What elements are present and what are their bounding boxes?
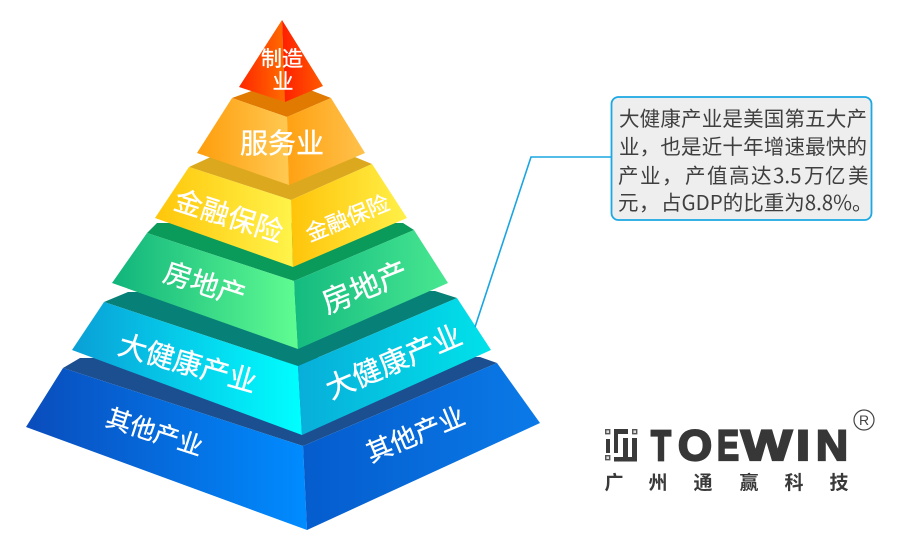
- tier: 大健康产业: [72, 291, 491, 435]
- callout box: ，: [639, 186, 660, 216]
- wordmark: T: [651, 422, 671, 470]
- logo: TOEWIN: [604, 410, 874, 495]
- callout box: 达: [751, 159, 772, 189]
- callout box: 业，也是近十年增速最快的: [619, 130, 867, 160]
- tier: 制造业: 业: [272, 66, 294, 96]
- tier: 服务业: [197, 88, 365, 185]
- tier: 其他产业: 其他产业: [360, 396, 470, 470]
- wordmark: [651, 422, 848, 470]
- tier: 金融保险: 金融保险: [300, 186, 394, 248]
- wordmark: W: [741, 422, 793, 470]
- company name: 赢: [739, 468, 759, 495]
- callout box: 大健康产业是美国第五大产: [619, 102, 867, 132]
- company name: [604, 468, 849, 495]
- callout box: [612, 97, 873, 220]
- company name: 广: [604, 468, 624, 495]
- wordmark: N: [816, 422, 848, 470]
- tier: 其他产业: 其他产业: [102, 398, 208, 464]
- company name: 通: [693, 468, 713, 495]
- tier: 金融保险: 金融保险: [170, 179, 288, 251]
- company name: 科: [784, 468, 804, 495]
- icon: logo mark: [606, 429, 637, 462]
- tier: 房地产: [112, 223, 448, 349]
- company name: 州: [648, 468, 668, 495]
- callout box: ，: [662, 159, 682, 189]
- tier: 制造业: 制造: [261, 43, 303, 73]
- tier: 服务业: 服务业: [240, 122, 324, 162]
- registered mark: R: [859, 412, 869, 428]
- wordmark: I: [796, 422, 810, 470]
- callout box: 产: [618, 159, 638, 189]
- tier: 大健康产业: 大健康产业: [114, 323, 262, 401]
- callout box: 业: [640, 159, 660, 189]
- callout box: 万: [804, 159, 824, 189]
- tier: 大健康产业: 大健康产业: [318, 312, 468, 408]
- tier: 制造业: [239, 20, 323, 102]
- wordmark: E: [717, 422, 739, 470]
- callout box: 3.5: [773, 159, 801, 189]
- callout box: 高: [729, 159, 750, 189]
- tier: 其他产业: [26, 357, 540, 530]
- callout box: 占GDP的比重为8.8%。: [661, 186, 873, 216]
- callout box: 产: [685, 159, 706, 189]
- wordmark: O: [678, 422, 712, 470]
- connector line: [475, 157, 611, 327]
- tier: 房地产: 房地产: [159, 251, 251, 315]
- tier: 金融保险: [155, 155, 407, 267]
- company name: 技: [829, 468, 849, 495]
- callout box: 美: [848, 159, 868, 189]
- callout box: 值: [707, 159, 728, 189]
- tier: 房地产: 房地产: [314, 248, 414, 322]
- callout box: 亿: [825, 159, 846, 189]
- registered mark: [854, 410, 874, 430]
- callout box: 元: [618, 186, 638, 216]
